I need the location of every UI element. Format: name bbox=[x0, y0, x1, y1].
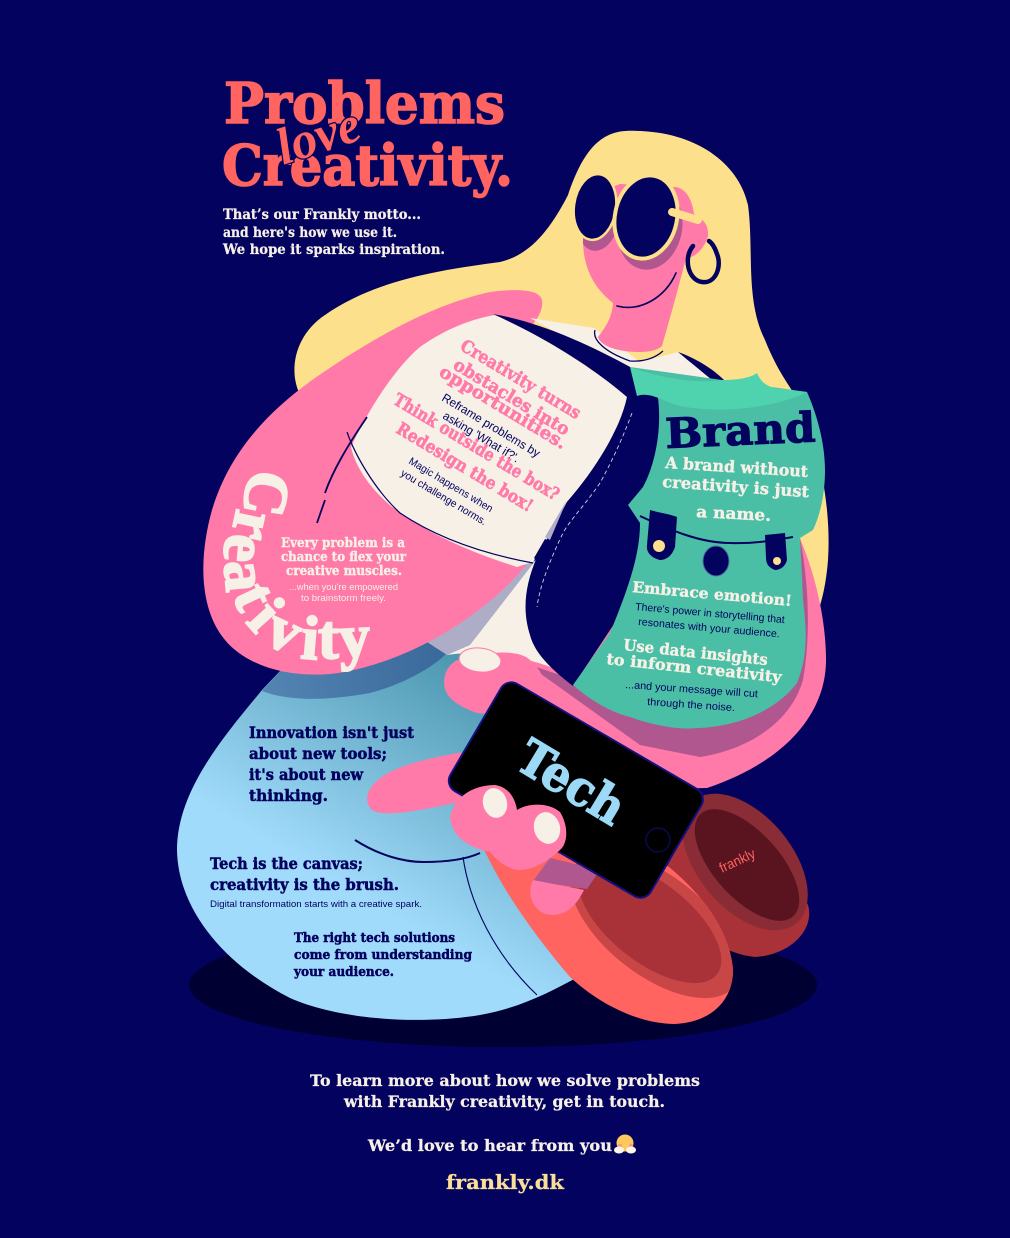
collar line bbox=[595, 330, 663, 361]
bib tab left bbox=[647, 510, 677, 560]
claim one line two: obstacles into bbox=[449, 355, 573, 440]
sleeve shadow band bbox=[262, 630, 447, 699]
front hand bbox=[450, 785, 566, 870]
fold line lower bbox=[317, 500, 325, 523]
claim one line one: Creativity turns bbox=[456, 336, 584, 424]
infographic canvas bbox=[177, 79, 829, 1194]
ground shadow bbox=[189, 923, 817, 1047]
lavender shadow on shirt bbox=[427, 560, 537, 655]
brand shirt panel bbox=[573, 367, 825, 729]
title bbox=[222, 71, 513, 199]
hand palm bbox=[444, 652, 547, 720]
glasses temple bbox=[672, 212, 698, 220]
creativity curved heading: Creativity bbox=[210, 466, 372, 673]
teal shirt bbox=[573, 367, 825, 729]
embrace support: There's power in storytelling that bbox=[635, 601, 785, 626]
brand copy bbox=[606, 403, 816, 714]
support two: to brainstorm freely. bbox=[301, 593, 386, 604]
glasses shadow bbox=[583, 206, 682, 270]
brand heading: Brand bbox=[664, 403, 816, 458]
hair bbox=[294, 131, 829, 612]
pink sleeve panel: creativity bbox=[203, 290, 542, 675]
phone body bbox=[444, 678, 707, 902]
solutions line three: your audience. bbox=[293, 965, 394, 980]
inner seam bbox=[463, 857, 537, 995]
creativity sleeve copy bbox=[389, 336, 584, 528]
earring bbox=[688, 241, 719, 282]
innovation line four: thinking. bbox=[249, 786, 328, 805]
cream shoulder bbox=[530, 318, 724, 385]
claim one line three: opportunities. bbox=[435, 362, 570, 454]
nail two bbox=[530, 809, 564, 847]
innovation line one: Innovation isn't just bbox=[249, 723, 415, 742]
skin bbox=[583, 184, 708, 352]
intro line two: and here's how we use it. bbox=[223, 225, 397, 241]
torso pink edge bbox=[520, 530, 826, 790]
tab button right bbox=[773, 557, 781, 565]
overall straps and bib bbox=[493, 314, 724, 686]
title line one: Problems bbox=[224, 71, 505, 137]
support one: ...when you're empowered bbox=[289, 582, 398, 593]
fold wedge bbox=[545, 500, 567, 540]
right strap bbox=[678, 352, 724, 380]
thumb nail bbox=[458, 646, 502, 674]
knee crease bbox=[355, 840, 480, 862]
phone bbox=[444, 678, 707, 902]
title line two: Creativity. bbox=[222, 133, 513, 199]
footer line two: with Frankly creativity, get in touch. bbox=[343, 1092, 665, 1111]
innovation line three: it's about new bbox=[249, 765, 364, 784]
intro text bbox=[222, 207, 445, 258]
nail one bbox=[480, 785, 510, 821]
embrace support two: resonates with your audience. bbox=[638, 616, 780, 640]
solutions line one: The right tech solutions bbox=[294, 931, 455, 946]
shoe brand: frankly bbox=[717, 845, 758, 876]
data heading: Use data insights bbox=[623, 635, 769, 669]
embrace heading: Embrace emotion! bbox=[632, 578, 793, 610]
light collar bbox=[630, 367, 807, 410]
brand claim two: creativity is just bbox=[662, 472, 810, 501]
waist line bbox=[640, 516, 793, 543]
claim two line one: Think outside the box? bbox=[389, 390, 563, 505]
shoe ring bbox=[570, 863, 733, 998]
upper hand bbox=[444, 646, 547, 720]
phone heading: Tech bbox=[507, 728, 636, 837]
claim one support: Reframe problems by bbox=[439, 391, 543, 460]
brand claim one: A brand without bbox=[664, 453, 809, 481]
canvas line two: creativity is the brush. bbox=[210, 875, 399, 894]
cream sleeve bbox=[351, 315, 627, 567]
website: frankly.dk bbox=[446, 1170, 565, 1194]
canvas support: Digital transformation starts with a creative spark. bbox=[210, 899, 422, 910]
back shoe outer bbox=[660, 797, 809, 957]
data heading two: to inform creativity bbox=[606, 649, 784, 686]
torso mauve shade bbox=[527, 538, 808, 757]
torso shadow layers bbox=[520, 530, 826, 790]
forearm bbox=[367, 748, 480, 813]
back shoe ring bbox=[658, 771, 832, 953]
glasses right lens bbox=[607, 169, 685, 265]
coral leg and shoe bbox=[484, 850, 733, 1024]
intro line three: We hope it sparks inspiration. bbox=[222, 242, 445, 258]
centre button bbox=[703, 546, 729, 576]
footer line three: We’d love to hear from you bbox=[367, 1136, 612, 1155]
side tab bbox=[534, 539, 556, 565]
brand claim three: a name. bbox=[696, 502, 772, 525]
back shoe bbox=[658, 771, 832, 957]
mauve knee shade bbox=[533, 858, 600, 889]
footer line one: To learn more about how we solve problems bbox=[310, 1071, 700, 1090]
claim two line two: Redesign the box! bbox=[392, 419, 536, 517]
tech copy bbox=[210, 723, 472, 980]
icon: hugging emoji bbox=[614, 1134, 636, 1154]
home button bbox=[646, 828, 670, 852]
tech leg: blue trousers bbox=[177, 640, 578, 1020]
shoe sole inner bbox=[579, 875, 722, 983]
data support two: through the noise. bbox=[647, 696, 735, 714]
left strap and bib bbox=[493, 314, 665, 686]
claim two support two: you challenge norms. bbox=[398, 467, 489, 528]
every problem copy bbox=[281, 536, 406, 604]
coral leg bbox=[483, 830, 733, 1024]
pink ankle bbox=[530, 880, 584, 915]
intro line one: That’s our Frankly motto... bbox=[223, 207, 421, 223]
canvas line one: Tech is the canvas; bbox=[210, 854, 363, 873]
face and neck bbox=[570, 169, 719, 361]
claim one support two: asking 'What if?'. bbox=[440, 409, 522, 465]
sleeve detail lines bbox=[317, 417, 533, 563]
line two: chance to flex your bbox=[281, 550, 406, 565]
glasses left lens bbox=[570, 171, 620, 243]
solutions line two: come from understanding bbox=[294, 948, 472, 963]
line one: Every problem is a bbox=[281, 536, 405, 551]
bib stitching bbox=[537, 413, 632, 607]
tab button left bbox=[653, 540, 665, 552]
back shoe inner bbox=[676, 792, 818, 938]
sleeve hem line bbox=[347, 432, 533, 563]
shirt body bbox=[447, 556, 590, 690]
innovation line two: about new tools; bbox=[249, 744, 387, 763]
fold line bbox=[325, 417, 367, 493]
data support: ...and your message will cut bbox=[625, 679, 758, 700]
fingers bbox=[450, 785, 566, 870]
leg lines bbox=[355, 840, 537, 995]
smile bbox=[617, 273, 676, 307]
claim two support: Magic happens when bbox=[406, 455, 495, 515]
title love script: love bbox=[269, 96, 368, 176]
footer bbox=[310, 1071, 700, 1194]
line three: creative muscles. bbox=[286, 564, 402, 579]
bib tab right bbox=[765, 533, 787, 570]
